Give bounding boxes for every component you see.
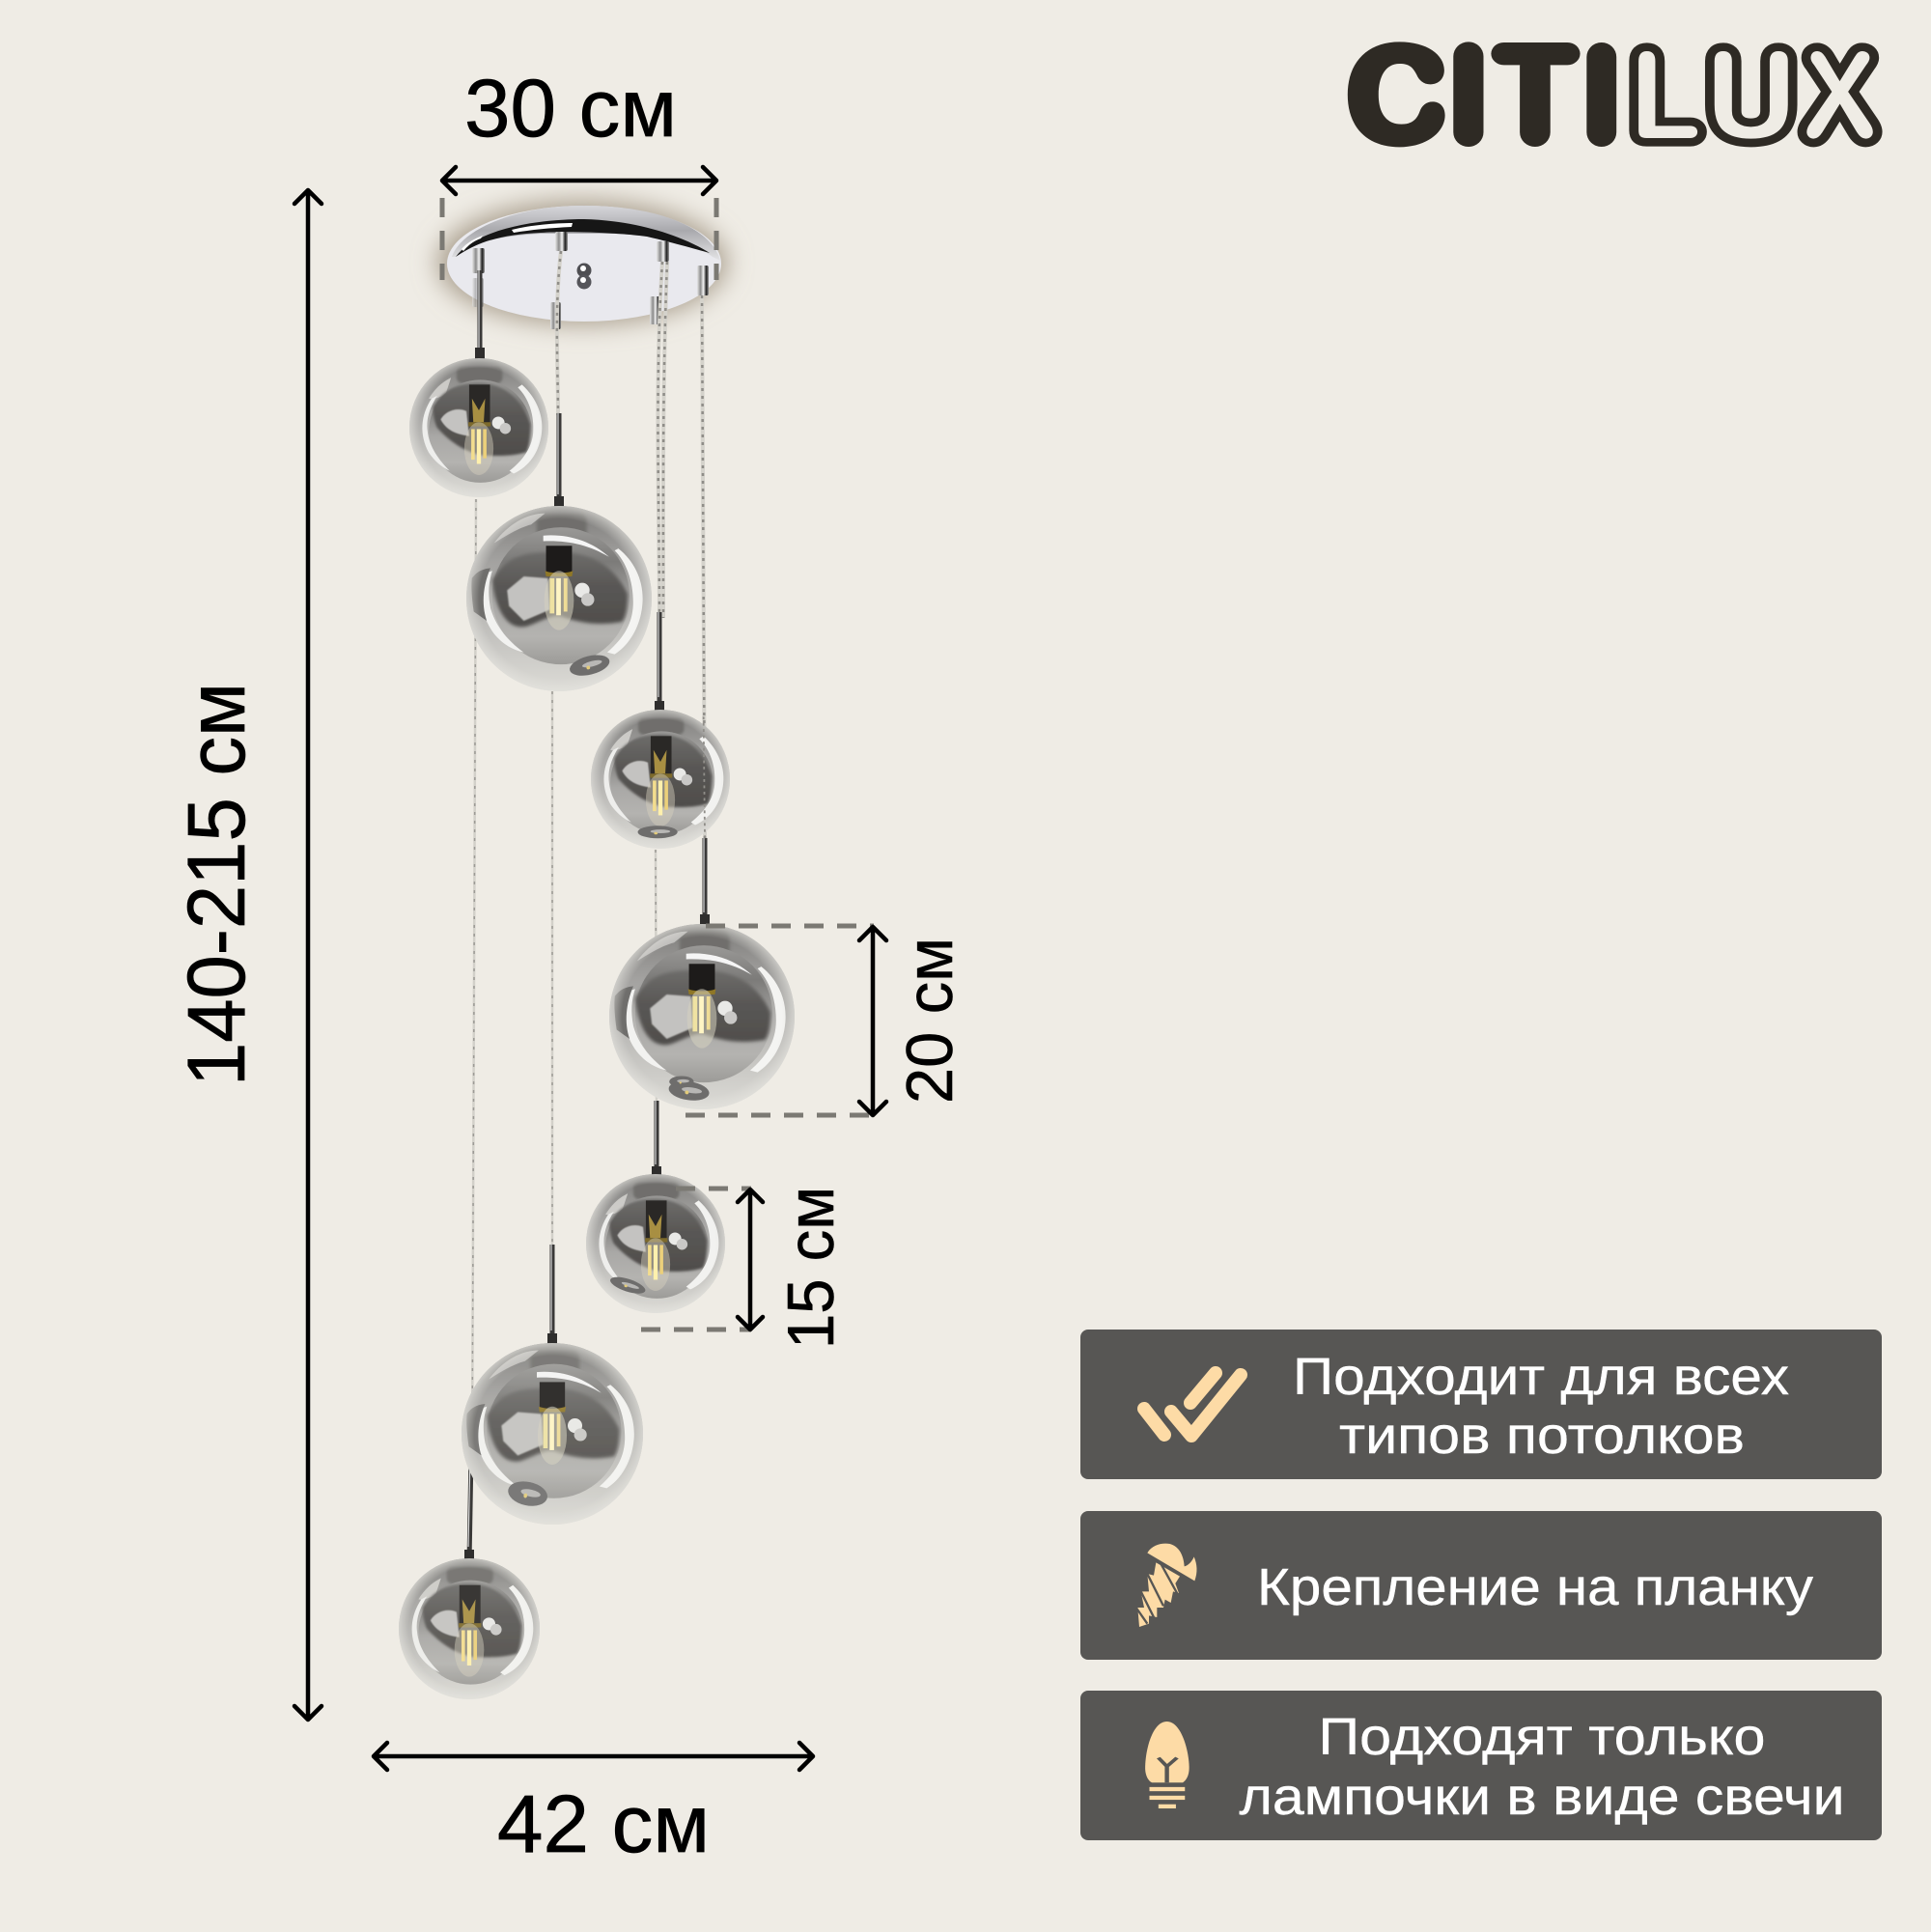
dimension: canopy width 30 см: 30 см	[464, 63, 677, 154]
dimension: canopy width 30 см	[442, 63, 716, 280]
dimension: height 140-215 см: 140-215 см	[171, 683, 262, 1086]
panel: all ceiling types	[1080, 1330, 1882, 1479]
logo: Citilux	[1348, 42, 1878, 147]
dimension: height 140-215 см	[171, 190, 322, 1720]
dimension: overall width 42 см: 42 см	[497, 1778, 710, 1869]
panel: bar mounting	[1080, 1511, 1882, 1660]
dimension: overall width 42 см	[374, 1743, 813, 1869]
icon: double check mark	[1144, 1373, 1241, 1436]
panel: candle bulbs only	[1080, 1691, 1882, 1840]
icon: candle bulb	[1145, 1722, 1189, 1808]
dimension: large globe 20 см	[686, 926, 966, 1115]
lamp: glass globe 3	[591, 710, 730, 849]
text: all ceiling types: Подходит для всех	[1293, 1348, 1789, 1406]
lamp: wires and cords	[468, 251, 705, 1562]
lamp: glass globe 2	[466, 506, 652, 691]
lamp: glass globe 6	[462, 1343, 643, 1525]
lamp: glass globe 7	[399, 1558, 540, 1699]
dimension: small globe 15 см	[641, 1187, 848, 1349]
panel: all ceiling types: типов потолков	[1339, 1407, 1745, 1465]
dimension: small globe 15 см: 15 см	[774, 1187, 848, 1349]
text: bar mounting: Крепление на планку	[1257, 1558, 1813, 1616]
panel: candle bulbs only: лампочки в виде свечи	[1240, 1768, 1844, 1826]
dimension: large globe 20 см: 20 см	[893, 938, 966, 1104]
lamp: glass globe 1	[409, 358, 548, 497]
lamp: glass globe 4	[609, 924, 795, 1109]
lamp: glass globe 5	[586, 1174, 725, 1313]
icon: screw	[1136, 1544, 1197, 1627]
text: candle bulbs only: Подходят только	[1319, 1708, 1765, 1766]
lamp: canopy	[437, 201, 727, 329]
